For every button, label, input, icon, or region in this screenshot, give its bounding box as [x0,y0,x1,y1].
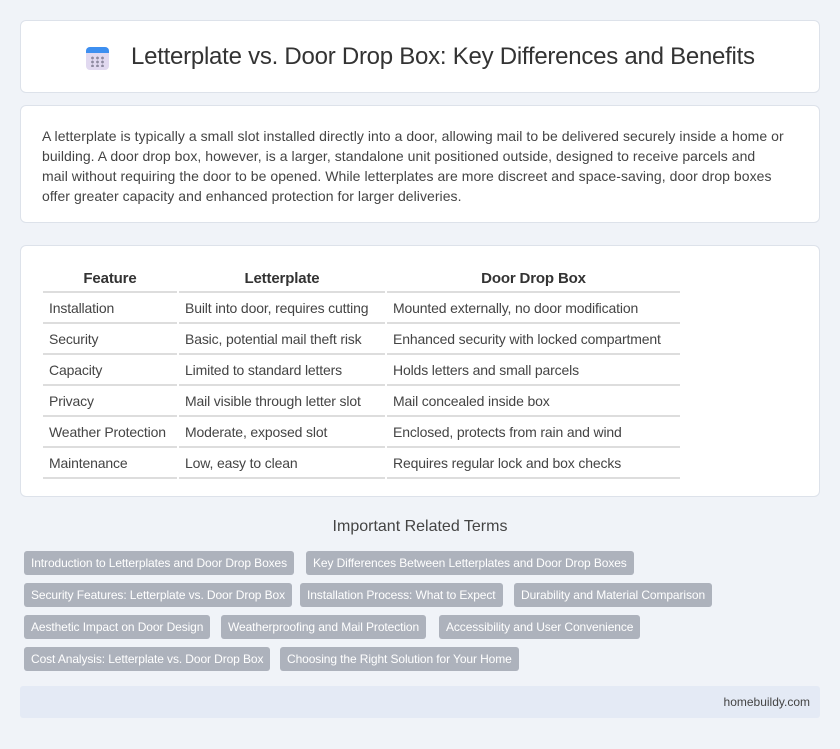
related terms tags: Choosing the Right Solution for Your Home [287,652,512,666]
related terms tags: Weatherproofing and Mail Protection [228,620,419,634]
comparison table card [20,245,820,497]
comparison table: Letterplate [244,270,320,286]
comparison table: Mail concealed inside box [393,392,550,408]
icon: calendar [86,47,109,70]
related terms tags: Introduction to Letterplates and Door Drop Boxes [31,556,287,570]
intro text card: mail without requiring the door to be opened. While letterplates are more discreet and space-saving, door drop boxes [42,168,772,184]
header card [20,20,820,93]
footer: homebuildy.com [724,695,810,709]
related terms heading: Important Related Terms [333,518,507,535]
comparison table: Low, easy to clean [185,454,298,470]
related terms tags: Security Features: Letterplate vs. Door Drop Box [31,588,285,602]
footer [20,686,820,718]
title: Letterplate vs. Door Drop Box: Key Differences and Benefits [131,43,755,70]
comparison table: Privacy [49,392,94,408]
intro text card [20,105,820,223]
related terms tags: Accessibility and User Convenience [446,620,633,634]
related terms tags: Cost Analysis: Letterplate vs. Door Drop Box [31,652,263,666]
comparison table: Mail visible through letter slot [185,392,361,408]
comparison table: Basic, potential mail theft risk [185,330,362,346]
related terms tags: Aesthetic Impact on Door Design [31,620,203,634]
comparison table: Door Drop Box [481,270,586,286]
comparison table: Mounted externally, no door modification [393,300,638,316]
related terms tags: Installation Process: What to Expect [307,588,496,602]
comparison table: Security [49,330,98,346]
related terms tags: Key Differences Between Letterplates and Door Drop Boxes [313,556,627,570]
comparison table: Built into door, requires cutting [185,300,368,316]
intro text card: A letterplate is typically a small slot installed directly into a door, allowing mail to be delivered securely inside a home or [42,128,784,144]
comparison table: Enhanced security with locked compartment [393,330,661,346]
comparison table: Maintenance [49,454,128,470]
intro text card: offer greater capacity and enhanced protection for larger deliveries. [42,188,462,204]
comparison table: Capacity [49,362,102,378]
related terms tags: Durability and Material Comparison [521,588,705,602]
comparison table: Feature [83,270,137,286]
comparison table: Limited to standard letters [185,362,342,378]
comparison table: Moderate, exposed slot [185,424,327,440]
comparison table: Weather Protection [49,424,166,440]
comparison table: Holds letters and small parcels [393,362,579,378]
comparison table: Enclosed, protects from rain and wind [393,424,622,440]
intro text card: building. A door drop box, however, is a larger, standalone unit positioned outside, designed to receive parcels and [42,148,755,164]
comparison table [43,270,680,479]
comparison table: Installation [49,300,114,316]
comparison table: Requires regular lock and box checks [393,454,621,470]
